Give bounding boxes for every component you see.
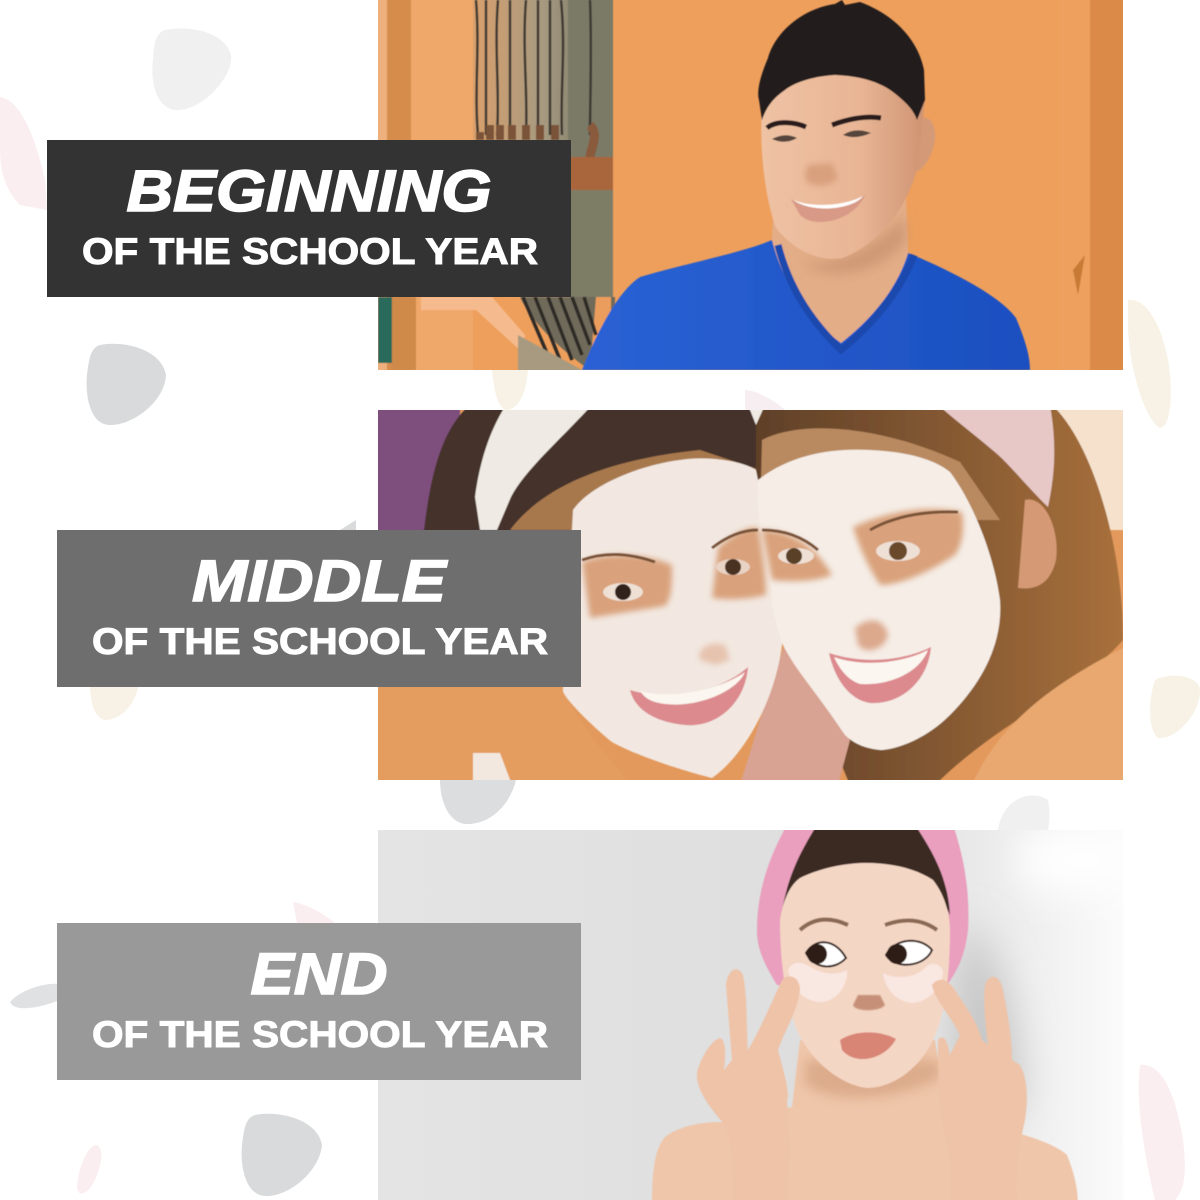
girls' smiles: [630, 647, 931, 725]
label: beginning of the school year: [47, 140, 571, 297]
label: end of the school year: [57, 923, 581, 1080]
photo: woman with pink towel and under-eye patches: [378, 825, 1123, 1200]
eyes and under-eye patches: [788, 920, 943, 1059]
photo: two girls wearing white face masks: [370, 400, 1130, 785]
right girl's face mask: [758, 450, 1000, 750]
man's ear: [916, 118, 936, 172]
woman's shoulders and neck: [652, 1040, 1078, 1200]
man's eyes, brows and smile: [767, 117, 881, 222]
label subheading: OF THE SCHOOL YEAR: [82, 231, 538, 272]
pink towel: [757, 825, 968, 985]
right girl's shoulder and left girl's arm: [972, 648, 1130, 785]
mask-free skin around eyes: [582, 509, 963, 665]
label heading: beginning: BEGINNING: [126, 159, 492, 224]
label: middle of the school year: [57, 530, 581, 687]
right girl's ear: [1018, 500, 1057, 588]
label heading: middle: MIDDLE: [192, 549, 449, 614]
girls' hair: [424, 410, 757, 530]
man's hair: [758, 0, 925, 120]
window grille: [378, 0, 615, 372]
soft shadow behind head: [950, 920, 1020, 1110]
man's neck: [771, 198, 909, 344]
man's shirt: [582, 240, 1030, 370]
woman's hands: [696, 968, 1028, 1135]
label heading: end: END: [250, 942, 388, 1007]
label subheading: OF THE SCHOOL YEAR: [92, 1014, 548, 1055]
left girl's skin base and face mask: [563, 458, 782, 778]
girls' eyes: [582, 512, 958, 601]
photo: smiling young man against an orange wall: [370, 0, 1135, 380]
label subheading: OF THE SCHOOL YEAR: [92, 621, 548, 662]
headbands: [475, 405, 592, 530]
man's face: [761, 65, 925, 259]
woman's hair: [780, 825, 950, 925]
woman's face: [780, 863, 950, 1088]
